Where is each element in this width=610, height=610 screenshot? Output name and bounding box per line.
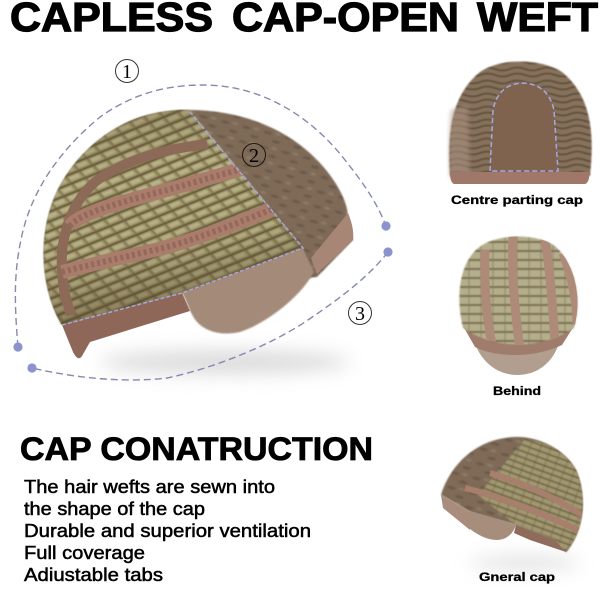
callout number 1: 1 [122,61,132,83]
label: behind: Behind [493,384,541,398]
label: general cap: Gneral cap [479,570,555,584]
main cap illustration [44,110,353,374]
dashed guide arc 1 [13,85,391,352]
lace stripes [62,144,275,315]
callout number 1 [116,60,138,83]
callout number 3: 3 [355,303,365,325]
behind cap illustration [459,236,577,375]
label: centre parting cap: Centre parting cap [451,193,583,207]
line 2: the shape of the cap [24,499,205,519]
title: capless cap open weft [10,0,598,40]
callout number 2 [242,144,266,167]
dashed guide arc 2 [27,247,393,380]
callout number 2: 2 [249,145,259,167]
ear tab [470,511,516,540]
cap lace crown [44,110,353,325]
cap body [449,62,592,176]
open weft area [44,110,303,325]
weft panel [459,236,577,344]
rim [311,213,353,274]
line 5: Adiustable tabs [24,565,163,585]
band [514,525,566,552]
pale side patches [449,105,470,178]
parting dashed outline [490,83,558,171]
centre parting cap illustration [449,62,592,184]
shadow [470,555,580,571]
rim band [441,495,470,530]
lace stripes [465,473,585,532]
cap rim [450,172,589,184]
ear tab [182,248,314,334]
line 3: Durable and superior ventilation [24,521,311,541]
weft panel [478,439,583,552]
feature list [24,477,311,585]
dashed boundary of weft area [62,112,303,325]
callout number 3 [348,302,372,325]
general cap illustration [441,437,585,571]
line 1: The hair wefts are sewn into [24,477,275,497]
section heading: cap construction: CAP CONATRUCTION [20,431,373,467]
line 4: Full coverage [24,543,145,563]
lace parting panel [490,83,558,171]
brim [474,340,560,375]
weft shading [44,110,303,325]
cap shadow [100,350,350,374]
cap lace base [441,437,583,552]
lace stripes [485,236,577,350]
adjustable band [62,293,190,358]
